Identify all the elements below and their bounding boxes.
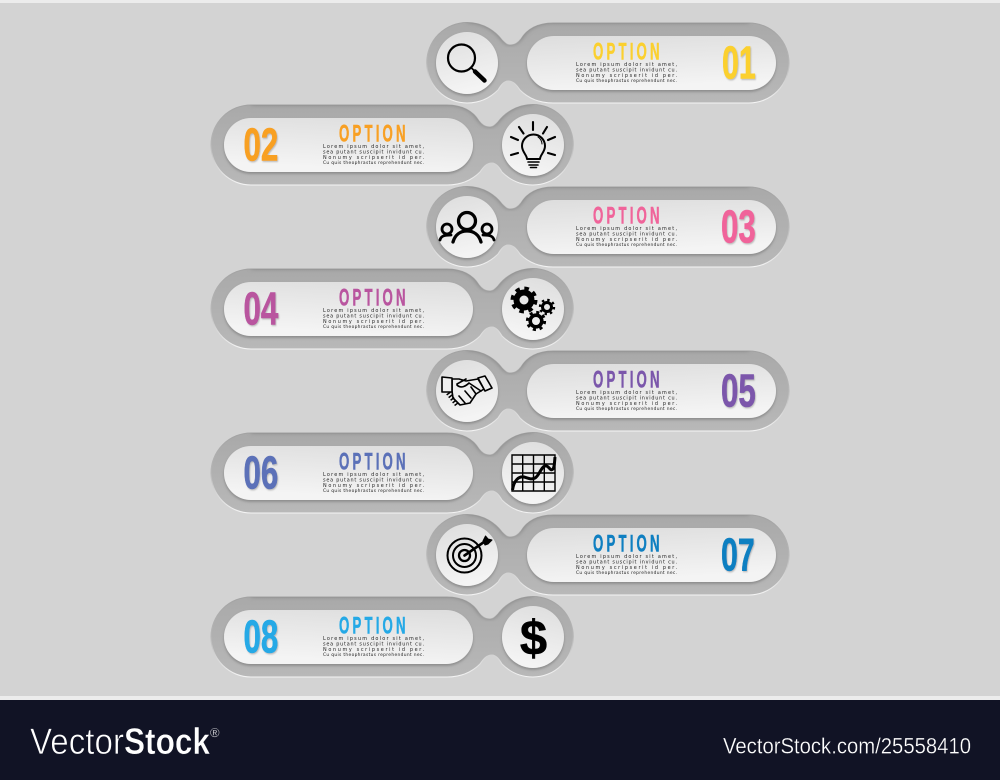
text block 07: sea putant suscipit invidunt cu.	[576, 559, 677, 565]
panel: option 08	[211, 594, 573, 677]
text block 02	[323, 144, 424, 166]
heading: option 05: OPTION	[593, 366, 663, 394]
text block 01: sea putant suscipit invidunt cu.	[576, 67, 677, 73]
text block 05: Nonumy scripserit id per.	[576, 401, 677, 407]
text block 08: sea putant suscipit invidunt cu.	[323, 641, 424, 647]
panel: option 02	[211, 102, 573, 185]
heading: option 01: OPTION	[593, 38, 663, 66]
text block 05: Lorem ipsum dolor sit amet,	[576, 390, 677, 396]
text block 03: Lorem ipsum dolor sit amet,	[576, 226, 677, 232]
text block 08: Cu quis theophrastus reprehendunt nec.	[323, 652, 424, 658]
text block 05	[576, 390, 677, 412]
panel: option 05	[427, 348, 789, 431]
text block 08: Nonumy scripserit id per.	[323, 647, 424, 653]
icon: gears	[512, 288, 554, 330]
number 06: 06	[244, 448, 278, 499]
heading: option 08: OPTION	[339, 612, 409, 640]
number 02: 02	[244, 120, 278, 171]
text block 05: Cu quis theophrastus reprehendunt nec.	[576, 406, 677, 412]
heading: option 03: OPTION	[593, 202, 663, 230]
icon: dollar sign: $	[520, 612, 547, 666]
logo: VectorStock: Stock	[124, 721, 210, 762]
panel: option 03	[427, 184, 789, 267]
text block 03: sea putant suscipit invidunt cu.	[576, 231, 677, 237]
text block 04: sea putant suscipit invidunt cu.	[323, 313, 424, 319]
text block 05: sea putant suscipit invidunt cu.	[576, 395, 677, 401]
heading: option 04: OPTION	[339, 284, 409, 312]
icon: handshake	[442, 376, 492, 405]
panel: option 07	[427, 512, 789, 595]
text block 06: sea putant suscipit invidunt cu.	[323, 477, 424, 483]
heading: option 06: OPTION	[339, 448, 409, 476]
number 08: 08	[244, 612, 278, 663]
text block 01	[576, 62, 677, 84]
text block 01: Cu quis theophrastus reprehendunt nec.	[576, 78, 677, 84]
icon: line chart	[512, 455, 555, 491]
text block 06: Nonumy scripserit id per.	[323, 483, 424, 489]
number 07: 07	[721, 530, 755, 581]
icon: magnifying glass	[448, 44, 484, 80]
panel: option 04	[211, 266, 573, 349]
text block 07: Nonumy scripserit id per.	[576, 565, 677, 571]
text block 01: Lorem ipsum dolor sit amet,	[576, 62, 677, 68]
panel: option 01	[427, 20, 789, 103]
icon: light bulb	[511, 122, 555, 168]
text block 02: Lorem ipsum dolor sit amet,	[323, 144, 424, 150]
text block 04: Nonumy scripserit id per.	[323, 319, 424, 325]
text block 02: Cu quis theophrastus reprehendunt nec.	[323, 160, 424, 166]
text block 02: Nonumy scripserit id per.	[323, 155, 424, 161]
text block 07: Lorem ipsum dolor sit amet,	[576, 554, 677, 560]
text block 06: Cu quis theophrastus reprehendunt nec.	[323, 488, 424, 494]
text block 08	[323, 636, 424, 658]
number 03: 03	[721, 202, 756, 253]
text block 07: Cu quis theophrastus reprehendunt nec.	[576, 570, 677, 576]
icon: people	[440, 212, 494, 242]
text block 03: Cu quis theophrastus reprehendunt nec.	[576, 242, 677, 248]
heading: option 02: OPTION	[339, 120, 409, 148]
text block 03	[576, 226, 677, 248]
text block 02: sea putant suscipit invidunt cu.	[323, 149, 424, 155]
text block 04: Cu quis theophrastus reprehendunt nec.	[323, 324, 424, 330]
number 04: 04	[244, 284, 278, 335]
icon: target	[448, 536, 492, 572]
footer bar	[0, 700, 1000, 780]
text block 07	[576, 554, 677, 576]
logo: VectorStock: Vector	[30, 721, 124, 762]
heading: option 07: OPTION	[593, 530, 663, 558]
text block 08: Lorem ipsum dolor sit amet,	[323, 636, 424, 642]
text block 03: Nonumy scripserit id per.	[576, 237, 677, 243]
text block 04: Lorem ipsum dolor sit amet,	[323, 308, 424, 314]
number 05: 05	[721, 366, 756, 417]
text block 06: Lorem ipsum dolor sit amet,	[323, 472, 424, 478]
logo: VectorStock: ®	[210, 725, 220, 740]
logo: VectorStock	[30, 721, 220, 762]
footer id text: VectorStock.com/25558410	[723, 734, 971, 758]
text block 06	[323, 472, 424, 494]
number 01: 01	[722, 38, 756, 89]
panel: option 06	[211, 430, 573, 513]
text block 01: Nonumy scripserit id per.	[576, 73, 677, 79]
text block 04	[323, 308, 424, 330]
